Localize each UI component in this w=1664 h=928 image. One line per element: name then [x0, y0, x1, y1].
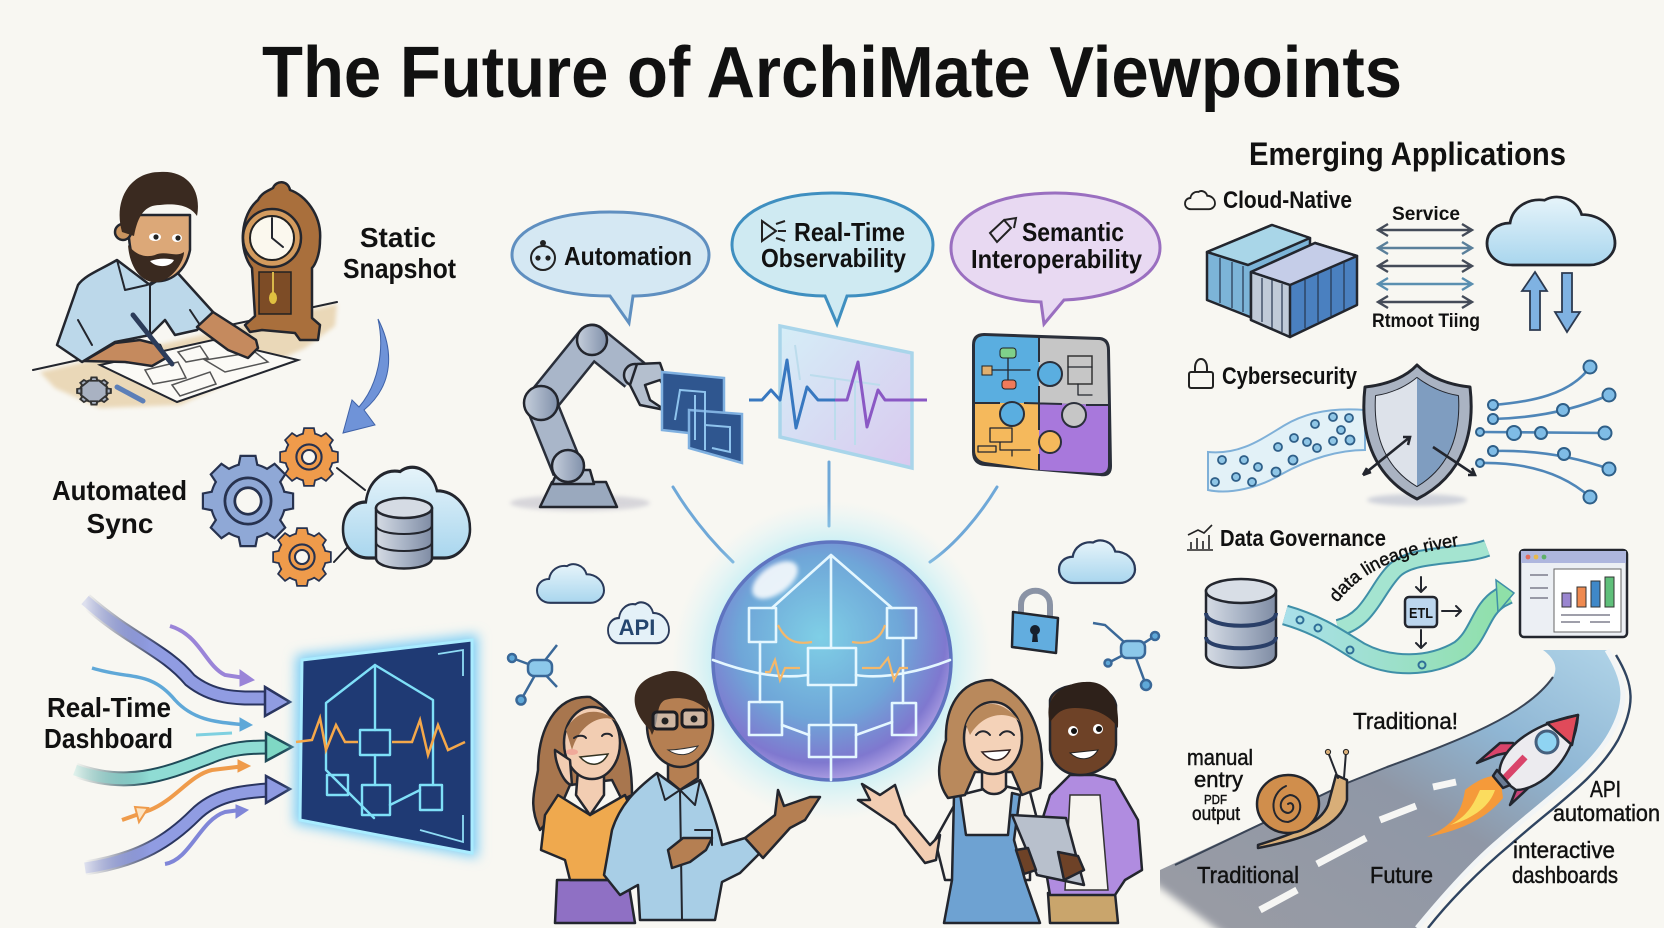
illustration: beams from sphere — [673, 462, 997, 562]
label: traditional upper: Traditiona! — [1353, 708, 1458, 734]
label: automated: Automated — [52, 475, 187, 506]
small gear and pencil on desk — [77, 377, 143, 405]
curved label: data lineage river: data lineage river — [1331, 536, 1458, 602]
icon: shield — [1363, 365, 1475, 506]
data stream inbound — [1208, 409, 1365, 492]
arrow: snapshot to sync — [343, 319, 389, 433]
label: dashboard: Dashboard — [44, 723, 173, 754]
illustration: robot arm — [510, 325, 673, 511]
illustration: architect at desk — [33, 172, 337, 408]
icon: large cloud — [1487, 197, 1615, 265]
desk — [33, 302, 337, 408]
blueprint sheet — [100, 340, 298, 402]
illustration: road from traditional to future — [1150, 650, 1631, 928]
icon: chart — [1187, 525, 1213, 550]
label: service: Service — [1392, 204, 1460, 225]
section: cloud-native — [1185, 187, 1615, 337]
heading: Emerging Applications — [1249, 136, 1566, 172]
illustration: blueprint panels held by robot — [662, 372, 742, 463]
label: real-time: Real-Time — [47, 692, 171, 723]
illustration: puzzle pieces — [972, 333, 1112, 476]
double-headed arrows — [1378, 224, 1472, 308]
icon: cloud with database — [343, 467, 470, 568]
callout text line 1: Semantic — [1022, 217, 1124, 247]
icon: orange gear top — [281, 429, 337, 485]
stream arrow 1 — [85, 600, 290, 716]
label: output: output — [1192, 804, 1241, 825]
arrows: upload and download — [1522, 272, 1580, 332]
flame — [1427, 776, 1503, 837]
label: automation: automation — [1553, 800, 1660, 826]
person: man with purple jacket and tablet — [1012, 682, 1142, 923]
icon: link tag — [990, 218, 1016, 242]
panel: evolution timeline (left column) — [33, 172, 478, 868]
stream arrow 7 — [165, 805, 248, 864]
illustration: data streams — [75, 600, 292, 868]
illustration: holographic monitor with heartbeat — [749, 326, 927, 468]
callout: real-time observability — [732, 193, 933, 324]
road labels — [1187, 708, 1660, 888]
label: interactive: interactive — [1513, 837, 1615, 863]
icon: orange gear bottom — [274, 529, 330, 585]
title: The Future of ArchiMate Viewpoints — [262, 33, 1402, 113]
label: garbled caption: Rtmoot Tiing — [1372, 311, 1480, 332]
grandfather clock — [243, 182, 320, 340]
data lineage river — [1285, 548, 1514, 668]
panel: emerging applications (right column) — [1160, 136, 1660, 928]
stream arrow 6 — [85, 776, 290, 868]
stream arrow 5 — [122, 760, 250, 822]
heartbeat line — [749, 360, 927, 428]
man in blue shirt — [57, 172, 258, 366]
stream arrow 4 — [75, 733, 292, 779]
callout text line 2: Observability — [761, 243, 906, 273]
icon: large blue gear — [204, 457, 292, 545]
label: sync: Sync — [87, 508, 153, 539]
callout: semantic interoperability — [951, 193, 1160, 324]
icon: robot head — [531, 241, 555, 270]
section: data governance — [1187, 524, 1628, 674]
icon: API cloud — [608, 602, 669, 643]
icon: lock outline — [1189, 359, 1213, 388]
ETL box with arrows — [1405, 577, 1461, 648]
section: cybersecurity — [1189, 359, 1616, 506]
snail — [1257, 749, 1349, 848]
icon: floating cloud right — [1059, 540, 1135, 583]
icon: database — [1206, 579, 1276, 668]
section label: Cybersecurity — [1222, 363, 1358, 390]
label: snapshot line: Snapshot — [343, 253, 456, 284]
icon: padlock — [1012, 591, 1058, 653]
person: man with glasses and blue shirt — [604, 671, 820, 920]
callout text: Automation — [564, 241, 692, 271]
label: entry: entry — [1194, 767, 1243, 792]
label: API: API — [1590, 776, 1621, 802]
stream arrow 3 — [92, 668, 252, 731]
person: woman with overalls — [858, 680, 1045, 923]
ETL box with arrows: ETL — [1409, 605, 1433, 622]
callout text line 1: Real-Time — [794, 217, 905, 247]
tablet — [1012, 815, 1084, 885]
lane dashes — [1260, 782, 1456, 910]
label: traditional: Traditional — [1197, 862, 1299, 888]
illustration: glowing architecture sphere — [672, 501, 992, 821]
API text: API — [619, 615, 655, 640]
small teal arrow — [196, 733, 232, 735]
icon: floating cloud left — [537, 564, 604, 603]
icon: cloud outline — [1185, 191, 1215, 209]
illustration: containers — [1207, 225, 1357, 337]
icon: network node right — [1093, 623, 1159, 690]
panel: three trends (centre top) — [510, 193, 1160, 511]
label: future: Future — [1370, 862, 1433, 888]
illustration: automated sync gears and cloud database — [204, 429, 470, 585]
icon: network node left — [508, 645, 557, 704]
label: dashboards: dashboards — [1512, 862, 1618, 888]
label: PDF: PDF — [1204, 792, 1227, 807]
section label: Data Governance — [1220, 525, 1386, 551]
illustration: glowing dashboard panel — [294, 634, 478, 858]
label: static snapshot: Static — [360, 222, 436, 253]
icon: signal — [762, 221, 786, 241]
dashboard window — [1520, 550, 1627, 637]
callout text line 2: Interoperability — [971, 244, 1142, 274]
connectors — [334, 468, 365, 562]
stream arrow 2 — [170, 626, 254, 686]
label: manual: manual — [1187, 745, 1253, 770]
section label: Cloud-Native — [1223, 187, 1352, 214]
person: woman with orange top — [533, 697, 640, 923]
data stream outbound — [1476, 360, 1616, 504]
illustration: team of four people — [533, 671, 1142, 923]
rocket — [1477, 715, 1578, 805]
puzzle tabs — [1038, 362, 1062, 386]
callout: automation — [512, 212, 709, 323]
